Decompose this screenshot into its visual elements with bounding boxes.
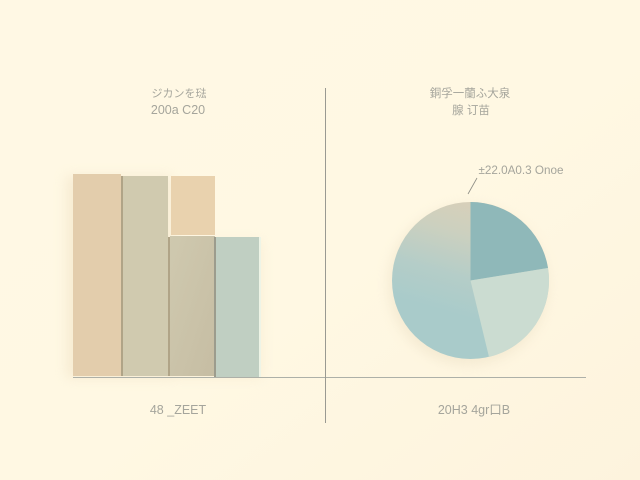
horizontal axis	[73, 377, 586, 378]
panel: pie chart	[388, 202, 549, 365]
right heading	[430, 86, 511, 117]
left heading: 200a C20	[151, 103, 205, 117]
left footer label: 48 _ZEET	[150, 403, 206, 417]
right heading: 腺 订苗	[452, 103, 490, 117]
panel: bar chart	[66, 174, 262, 378]
left heading: ジカンを琺	[152, 87, 206, 100]
vertical divider	[325, 88, 326, 423]
bar 3 upper	[171, 176, 215, 235]
bar 4	[214, 237, 261, 377]
pie callout: ±22.0A0.3 Onoe	[478, 164, 564, 177]
left heading	[151, 87, 206, 117]
slice: pale green	[470, 268, 549, 357]
bar 3 lower	[168, 236, 215, 376]
bar 1	[73, 174, 121, 376]
right footer label: 20H3 4gr口B	[438, 403, 510, 417]
pie callout	[468, 164, 564, 194]
slice: beige to blue	[392, 202, 549, 359]
bar 2	[121, 176, 168, 376]
right heading: 銅孚一蘭ふ大泉	[430, 86, 511, 100]
slice: dark teal	[470, 202, 548, 280]
